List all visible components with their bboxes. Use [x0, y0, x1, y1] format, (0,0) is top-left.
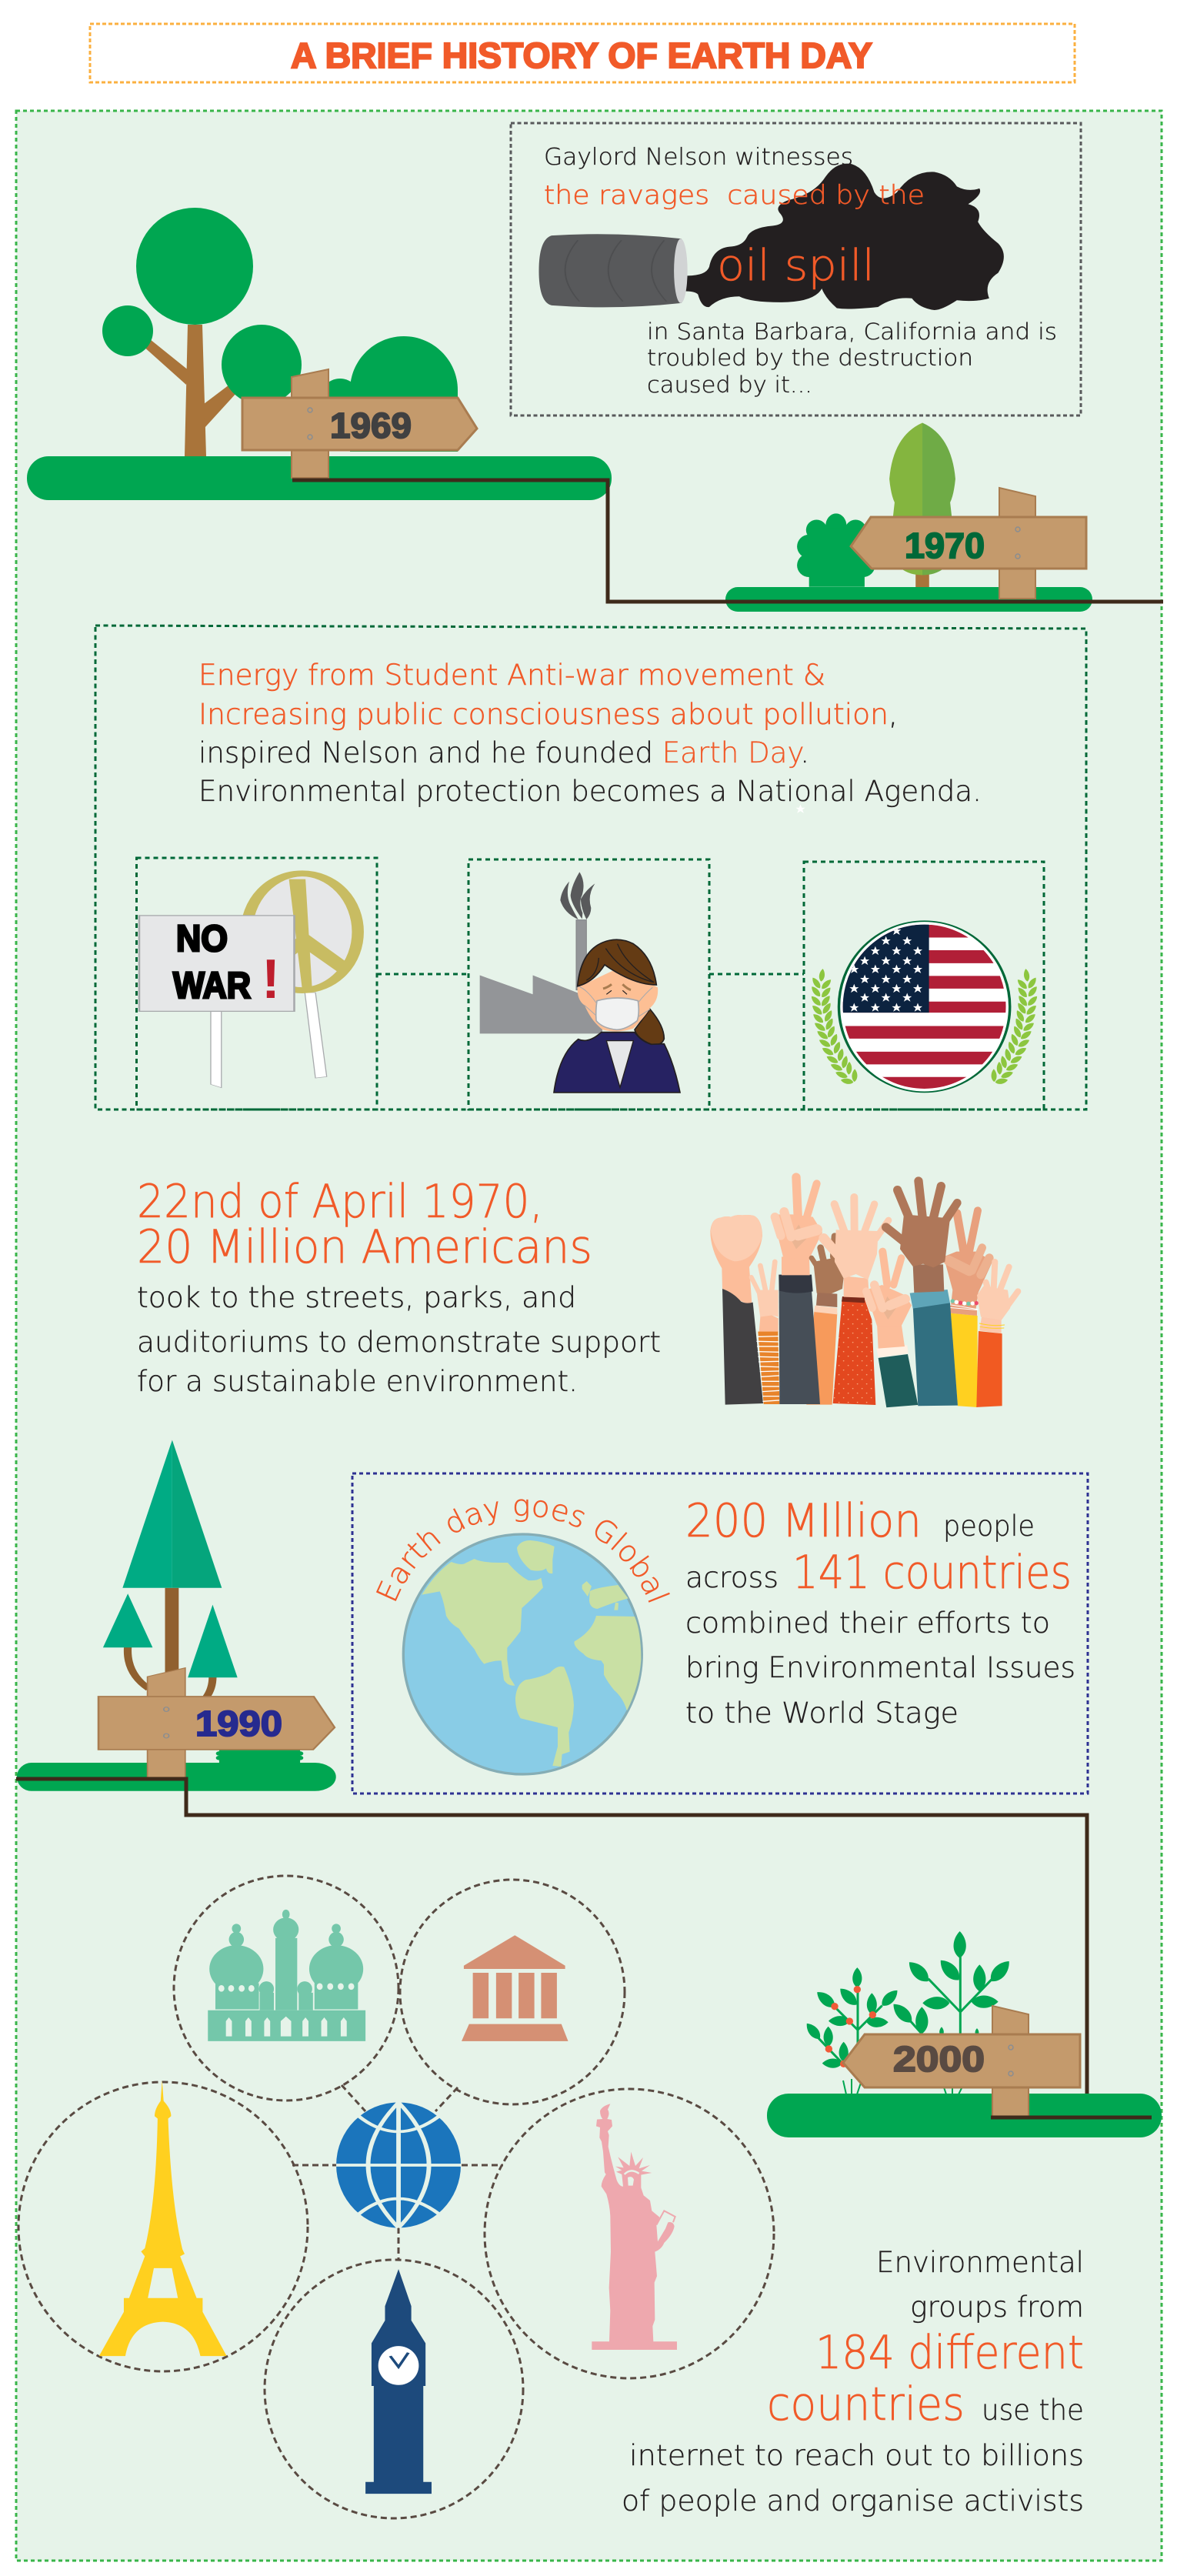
text: 200 million people — [685, 1494, 1075, 1730]
text: 200 million people: combined their efforts to — [685, 1607, 1050, 1640]
signpost 1969: 1969 — [330, 405, 412, 445]
text: internet and 184 countries: groups from — [910, 2291, 1084, 2324]
hand four, brown back — [812, 1236, 835, 1272]
hand seven, brown open — [913, 1303, 958, 1406]
signpost 1969 — [242, 369, 477, 478]
icon: factory body — [480, 976, 602, 1033]
icon: statue of liberty — [592, 2104, 677, 2350]
icon: white star speck — [796, 804, 805, 813]
network of landmarks — [18, 1876, 774, 2518]
milestone 1990: tree and signpost — [17, 1440, 336, 1791]
text: 200 million people: 141 countries — [792, 1546, 1072, 1600]
ground 1990 — [17, 1750, 336, 1791]
signpost 2000 — [843, 2006, 1080, 2117]
signpost 1990 — [98, 1668, 335, 1779]
text: internet and 184 countries: countries — [767, 2377, 965, 2431]
ground 2000 — [767, 2094, 1162, 2137]
text: 200 million people: across — [685, 1561, 779, 1594]
bracelet — [951, 1299, 979, 1306]
icon: woman with mask and chimney smoke — [554, 872, 680, 1093]
text: internet and 184 countries — [622, 2246, 1084, 2518]
hand two — [752, 1262, 775, 1293]
connected icon boxes — [137, 858, 1044, 1109]
text: witness intro: Gaylord Nelson witnesses — [544, 144, 853, 171]
signpost 1970: 1970 — [905, 526, 985, 566]
curved heading — [395, 1516, 650, 1605]
icon: laurel right — [991, 969, 1039, 1085]
hand eight, back peace — [957, 1210, 978, 1254]
text: santa barbara — [647, 319, 1057, 398]
signpost 1970 — [851, 488, 1086, 599]
text: internet and 184 countries: Environmental — [876, 2246, 1084, 2279]
icon: american flag — [839, 921, 1011, 1092]
grass tufts — [843, 2079, 963, 2094]
text: internet and 184 countries: internet to reach out to billions — [629, 2439, 1084, 2472]
ground 1969 — [27, 456, 612, 500]
hand nine, open small — [979, 1317, 1002, 1333]
icon: oil barrel and spill — [538, 164, 1004, 310]
milestone 1970: tree and signpost — [797, 422, 955, 587]
panel: earth day goes global: Earth day goes Global — [375, 1499, 670, 1603]
hand one — [710, 1215, 762, 1303]
timeline connector 1969 to 1970 — [292, 480, 1163, 602]
text: date headline — [137, 1175, 592, 1274]
sign label 1990: 1990 — [195, 1703, 282, 1743]
text: 200 million people: people — [943, 1510, 1035, 1543]
hand six, peace — [879, 1354, 918, 1407]
panel: founding of Earth Day — [95, 626, 1086, 1109]
text: 200 million people: 200 MIllion — [685, 1494, 922, 1548]
milestone 2000: plants and signpost — [767, 1931, 1162, 2137]
hand three, peace — [779, 1290, 820, 1404]
icon: earth globe — [403, 1534, 642, 1774]
text: internet and 184 countries: of people and organise activists — [622, 2484, 1084, 2518]
timeline end at 2000 — [991, 2116, 1152, 2119]
text: demonstration: auditoriums to demonstrate support — [137, 1326, 661, 1359]
icon: no war placard — [139, 916, 295, 1088]
icon: classical temple — [462, 1935, 568, 2041]
tree 1970 — [889, 422, 955, 587]
dashed circles and connectors — [18, 1876, 774, 2518]
icon: mosque — [208, 1910, 365, 2041]
text: santa barbara: in Santa Barbara, California and is — [647, 319, 1057, 345]
icon: big ben — [365, 2269, 432, 2494]
panel: earth day goes global — [351, 1473, 1089, 1794]
icon: globe network hub — [336, 2102, 461, 2227]
signpost 2000: 2000 — [893, 2039, 985, 2079]
text: founding paragraph: Increasing public consciousness about pollution , — [198, 698, 898, 731]
text: founding paragraph: Energy from Student Anti-war movement & — [198, 659, 825, 692]
placard text: NO — [176, 919, 228, 959]
hand five, open — [833, 1296, 875, 1405]
section: 22nd of April 1970 — [137, 1175, 1018, 1407]
icon: laurel left — [809, 969, 858, 1085]
text: date headline: 22nd of April 1970, — [137, 1175, 543, 1229]
icon: eiffel tower — [99, 2080, 227, 2356]
text: demonstration: for a sustainable environment. — [137, 1365, 578, 1398]
text: oil spill: oil spill — [717, 241, 875, 291]
tree 1969 — [102, 208, 458, 456]
ground 1970 — [725, 587, 1092, 612]
text: demonstration: took to the streets, parks, and — [137, 1281, 576, 1314]
text: santa barbara: caused by it... — [647, 372, 812, 398]
placard text: WAR — [173, 966, 251, 1006]
icon: peace sign — [246, 873, 358, 1078]
placard text: ! — [262, 949, 280, 1010]
title banner — [90, 24, 1075, 82]
icon: raised hands — [710, 1177, 1018, 1407]
text: internet and 184 countries: use the — [982, 2394, 1084, 2427]
back sleeves — [806, 1312, 837, 1405]
text: founding paragraph — [198, 659, 982, 808]
tree 1990 — [103, 1440, 238, 1697]
text: ravages: the ravages caused by the — [544, 180, 925, 211]
text: founding paragraph: Environmental protection becomes a National Agenda. — [198, 775, 982, 808]
timeline line over 1970 ground — [608, 600, 1163, 603]
text: santa barbara: troubled by the destruction — [647, 345, 973, 371]
text: founding paragraph: inspired Nelson and he founded Earth Day. — [198, 736, 809, 769]
bush 1970 — [797, 513, 875, 587]
text: date headline: 20 Million Americans — [137, 1220, 592, 1274]
timeline connector 1990 to 2000 — [16, 1779, 1087, 2117]
text: demonstration — [137, 1281, 661, 1398]
text: internet and 184 countries: 184 different — [815, 2326, 1084, 2380]
icon: plants — [803, 1931, 1014, 2068]
placard text — [173, 919, 280, 1010]
text: 200 million people: to the World Stage — [685, 1697, 959, 1730]
text: 200 million people: bring Environmental Issues — [685, 1651, 1075, 1684]
panel: oil spill — [511, 123, 1081, 415]
milestone 1969: tree and signpost — [27, 208, 612, 500]
title banner: A BRIEF HISTORY OF EARTH DAY — [291, 35, 872, 75]
